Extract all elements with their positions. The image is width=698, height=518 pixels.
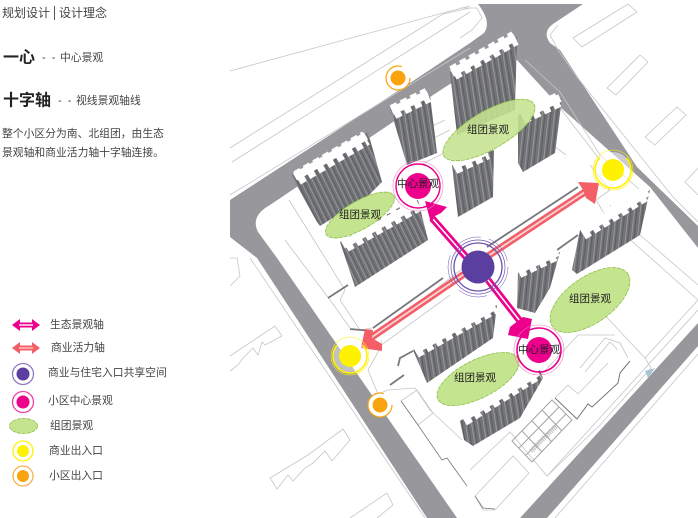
heading: one heart [3, 48, 103, 66]
cluster landscape: east: 组团景观 [569, 292, 611, 305]
legend: central landscape: 小区中心景观 [48, 394, 113, 407]
tower: west cluster [340, 200, 428, 287]
heading: one heart: 一心 [3, 48, 35, 66]
axis: commercial arrow north east [488, 182, 599, 256]
node: south central landscape: 中心景观 [518, 343, 560, 356]
legend: community entrance: 小区出入口 [49, 468, 103, 482]
axis: commercial arrow south west [361, 270, 470, 351]
legend: commercial axis [12, 340, 105, 354]
cluster landscape: west [319, 183, 401, 247]
hatched oval [531, 426, 556, 451]
node: north community entrance [386, 66, 410, 90]
heading: page title: 规划设计 [2, 5, 50, 20]
legend: community entrance [13, 466, 103, 486]
cluster landscape: west: 组团景观 [339, 208, 381, 221]
tower: north west [291, 132, 382, 226]
node: south west commercial entrance [331, 337, 369, 375]
tower: south east [460, 370, 543, 446]
road: south east [520, 323, 698, 518]
paving grid [512, 400, 572, 462]
node: south central landscape [514, 325, 564, 375]
heading: cross axis [3, 90, 141, 110]
legend: commercial entrance: 商业出入口 [49, 443, 103, 457]
node: north central landscape [393, 161, 443, 211]
tower: centre [452, 150, 494, 217]
panel: legend [10, 317, 167, 486]
axis: ecological arrow north west [425, 201, 467, 258]
tower: east [572, 190, 650, 274]
heading: cross axis: 视线景观轴线 [76, 93, 141, 107]
heading: one heart: 中心景观 [60, 51, 103, 64]
legend: cluster landscape [10, 418, 93, 434]
legend: shared space [12, 364, 167, 384]
site outlines [230, 4, 698, 518]
node: south community entrance [368, 393, 392, 417]
tower: north [390, 94, 437, 165]
heading: one heart: - - [42, 52, 57, 64]
legend: ecological axis [12, 317, 104, 331]
cluster landscape: north: 组团景观 [467, 123, 509, 136]
legend: shared space: 商业与住宅入口共享空间 [48, 365, 167, 379]
heading: cross axis: - - [58, 95, 73, 107]
tower: top centre [450, 37, 517, 135]
text block: description: 整个小区分为南、北组团，由生态 [2, 126, 164, 140]
node: north east commercial entrance [593, 150, 633, 190]
cluster landscape: east [539, 255, 641, 345]
node: north central landscape: 中心景观 [397, 177, 439, 190]
legend: commercial axis: 商业活力轴 [51, 340, 105, 354]
tower: south [413, 305, 497, 383]
hub: shared space [448, 237, 508, 297]
heading: page title: 设计理念 [59, 5, 107, 20]
tower: centre south [517, 252, 560, 313]
roads [230, 4, 698, 518]
cluster landscape: north [434, 88, 544, 172]
map: site plan [230, 4, 698, 518]
legend: central landscape [12, 392, 113, 412]
cluster landscape: south: 组团景观 [454, 371, 496, 384]
heading: page title [2, 5, 107, 20]
text block: description [2, 126, 164, 159]
tower: north east [518, 98, 562, 172]
legend: ecological axis: 生态景观轴 [50, 317, 104, 331]
legend: commercial entrance [13, 441, 103, 461]
heading: cross axis: 十字轴 [3, 90, 51, 110]
dark walls [328, 187, 630, 509]
text block: description: 景观轴和商业活力轴十字轴连接。 [2, 145, 164, 159]
cluster landscape: south [429, 342, 527, 416]
water marker [645, 368, 655, 378]
axis: ecological arrow south east [488, 280, 532, 339]
legend: cluster landscape: 组团景观 [50, 418, 93, 432]
